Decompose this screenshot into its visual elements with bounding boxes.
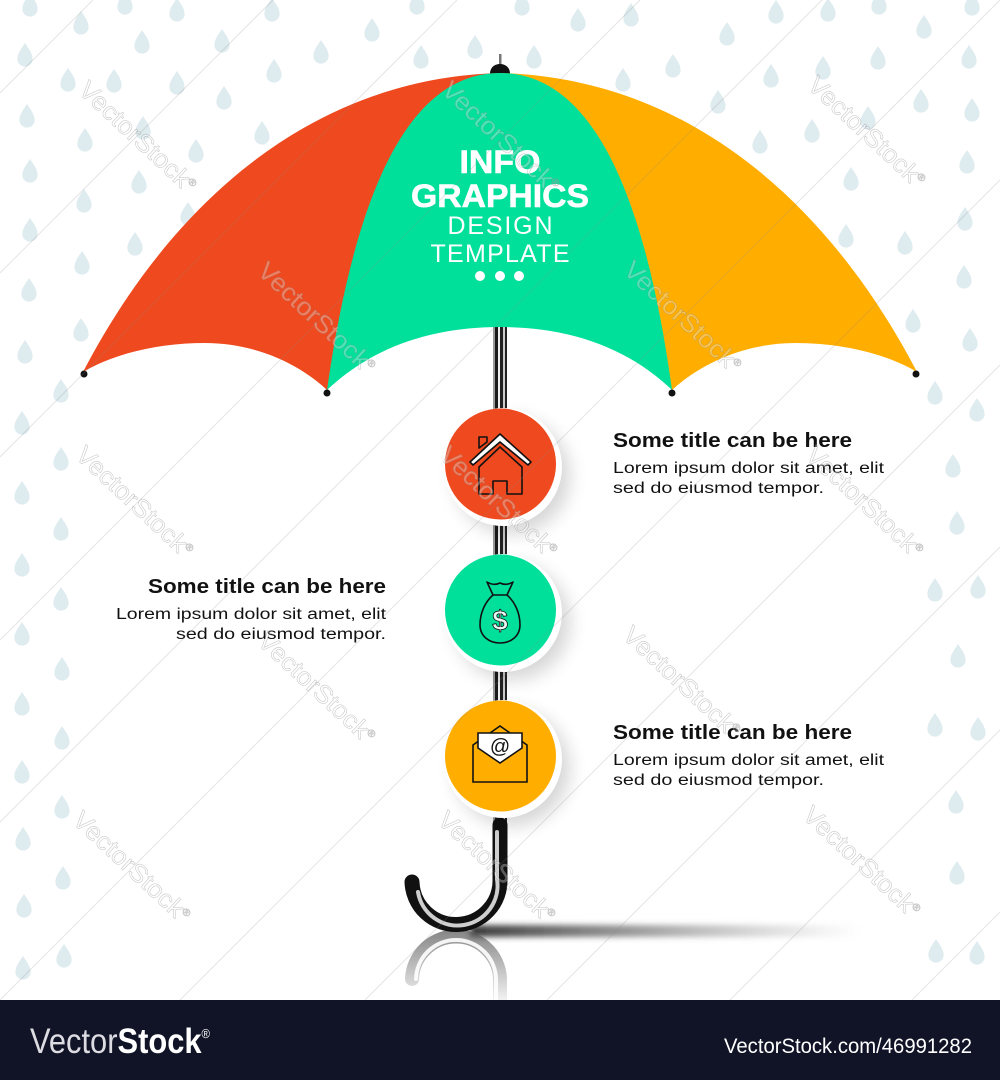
text block: step 2: Some title can be here	[148, 576, 386, 598]
watermarks: VectorStock	[434, 441, 551, 552]
footer logo: VectorStock	[30, 1022, 213, 1061]
umbrella canopy	[80, 54, 920, 396]
text block: step 1: Lorem ipsum dolor sit amet, elit	[613, 460, 885, 477]
heading: infographics design template: TEMPLATE	[430, 240, 570, 268]
watermarks: VectorStock	[252, 627, 369, 738]
heading dots	[475, 271, 524, 281]
watermarks: ®	[185, 176, 199, 190]
text block: step 3: Some title can be here	[613, 722, 852, 744]
heading: infographics design template: INFO	[460, 144, 540, 180]
watermarks: ®	[364, 727, 378, 741]
step 3: mail circle	[444, 700, 570, 826]
text block: step 2: Lorem ipsum dolor sit amet, elit	[116, 606, 387, 623]
step 1: home circle	[444, 408, 570, 534]
step 2: money circle	[444, 554, 570, 680]
text block: step 3	[613, 722, 885, 789]
text block: step 1	[613, 430, 885, 497]
watermarks: VectorStock	[432, 806, 549, 917]
text block: step 2: sed do eiusmod tempor.	[176, 626, 386, 643]
text block: step 1: Some title can be here	[613, 430, 852, 452]
text block: step 2	[116, 576, 387, 643]
watermarks: ®	[544, 906, 558, 920]
footer bar	[0, 1000, 1000, 1080]
watermarks: ®	[182, 541, 196, 555]
watermarks: ®	[179, 906, 193, 920]
watermarks: ®	[909, 901, 923, 915]
watermarks: VectorStock	[67, 806, 184, 917]
heading: infographics design template: DESIGN	[448, 212, 552, 240]
icon: house	[470, 434, 531, 494]
watermarks: VectorStock	[436, 76, 553, 187]
footer logo: ®	[202, 1026, 210, 1041]
icon: envelope: @	[490, 736, 510, 758]
watermarks: ®	[548, 176, 562, 190]
canopy top finial	[490, 54, 510, 74]
floor shadow	[470, 925, 860, 937]
watermarks: VectorStock	[252, 257, 369, 368]
canopy panel: green	[327, 73, 672, 390]
watermarks: ®	[729, 721, 743, 735]
footer url: VectorStock.com/46991282	[724, 1035, 972, 1058]
watermarks: VectorStock	[617, 621, 734, 732]
watermarks: VectorStock	[797, 801, 914, 912]
watermarks: VectorStock	[802, 71, 919, 182]
umbrella shaft	[493, 320, 507, 830]
text block: step 1: sed do eiusmod tempor.	[613, 480, 824, 497]
icon: money bag: $	[492, 605, 508, 636]
watermarks: ®	[914, 171, 928, 185]
umbrella handle	[412, 825, 500, 926]
watermarks	[67, 71, 931, 929]
watermarks: VectorStock	[70, 441, 187, 552]
watermarks: ®	[912, 541, 926, 555]
heading: infographics design template	[411, 144, 589, 281]
canopy panel: red	[83, 73, 500, 390]
watermarks: ®	[730, 356, 744, 370]
watermarks: ®	[364, 357, 378, 371]
watermarks: VectorStock	[618, 256, 735, 367]
canopy panel: orange	[500, 73, 917, 390]
heading: infographics design template: GRAPHICS	[411, 178, 589, 214]
text block: step 3: Lorem ipsum dolor sit amet, elit	[613, 752, 885, 769]
handle reflection	[412, 936, 500, 1010]
watermarks: ®	[546, 541, 560, 555]
watermarks: VectorStock	[800, 441, 917, 552]
canopy rib tips	[80, 370, 920, 396]
watermarks: VectorStock	[73, 76, 190, 187]
text block: step 3: sed do eiusmod tempor.	[613, 772, 824, 789]
